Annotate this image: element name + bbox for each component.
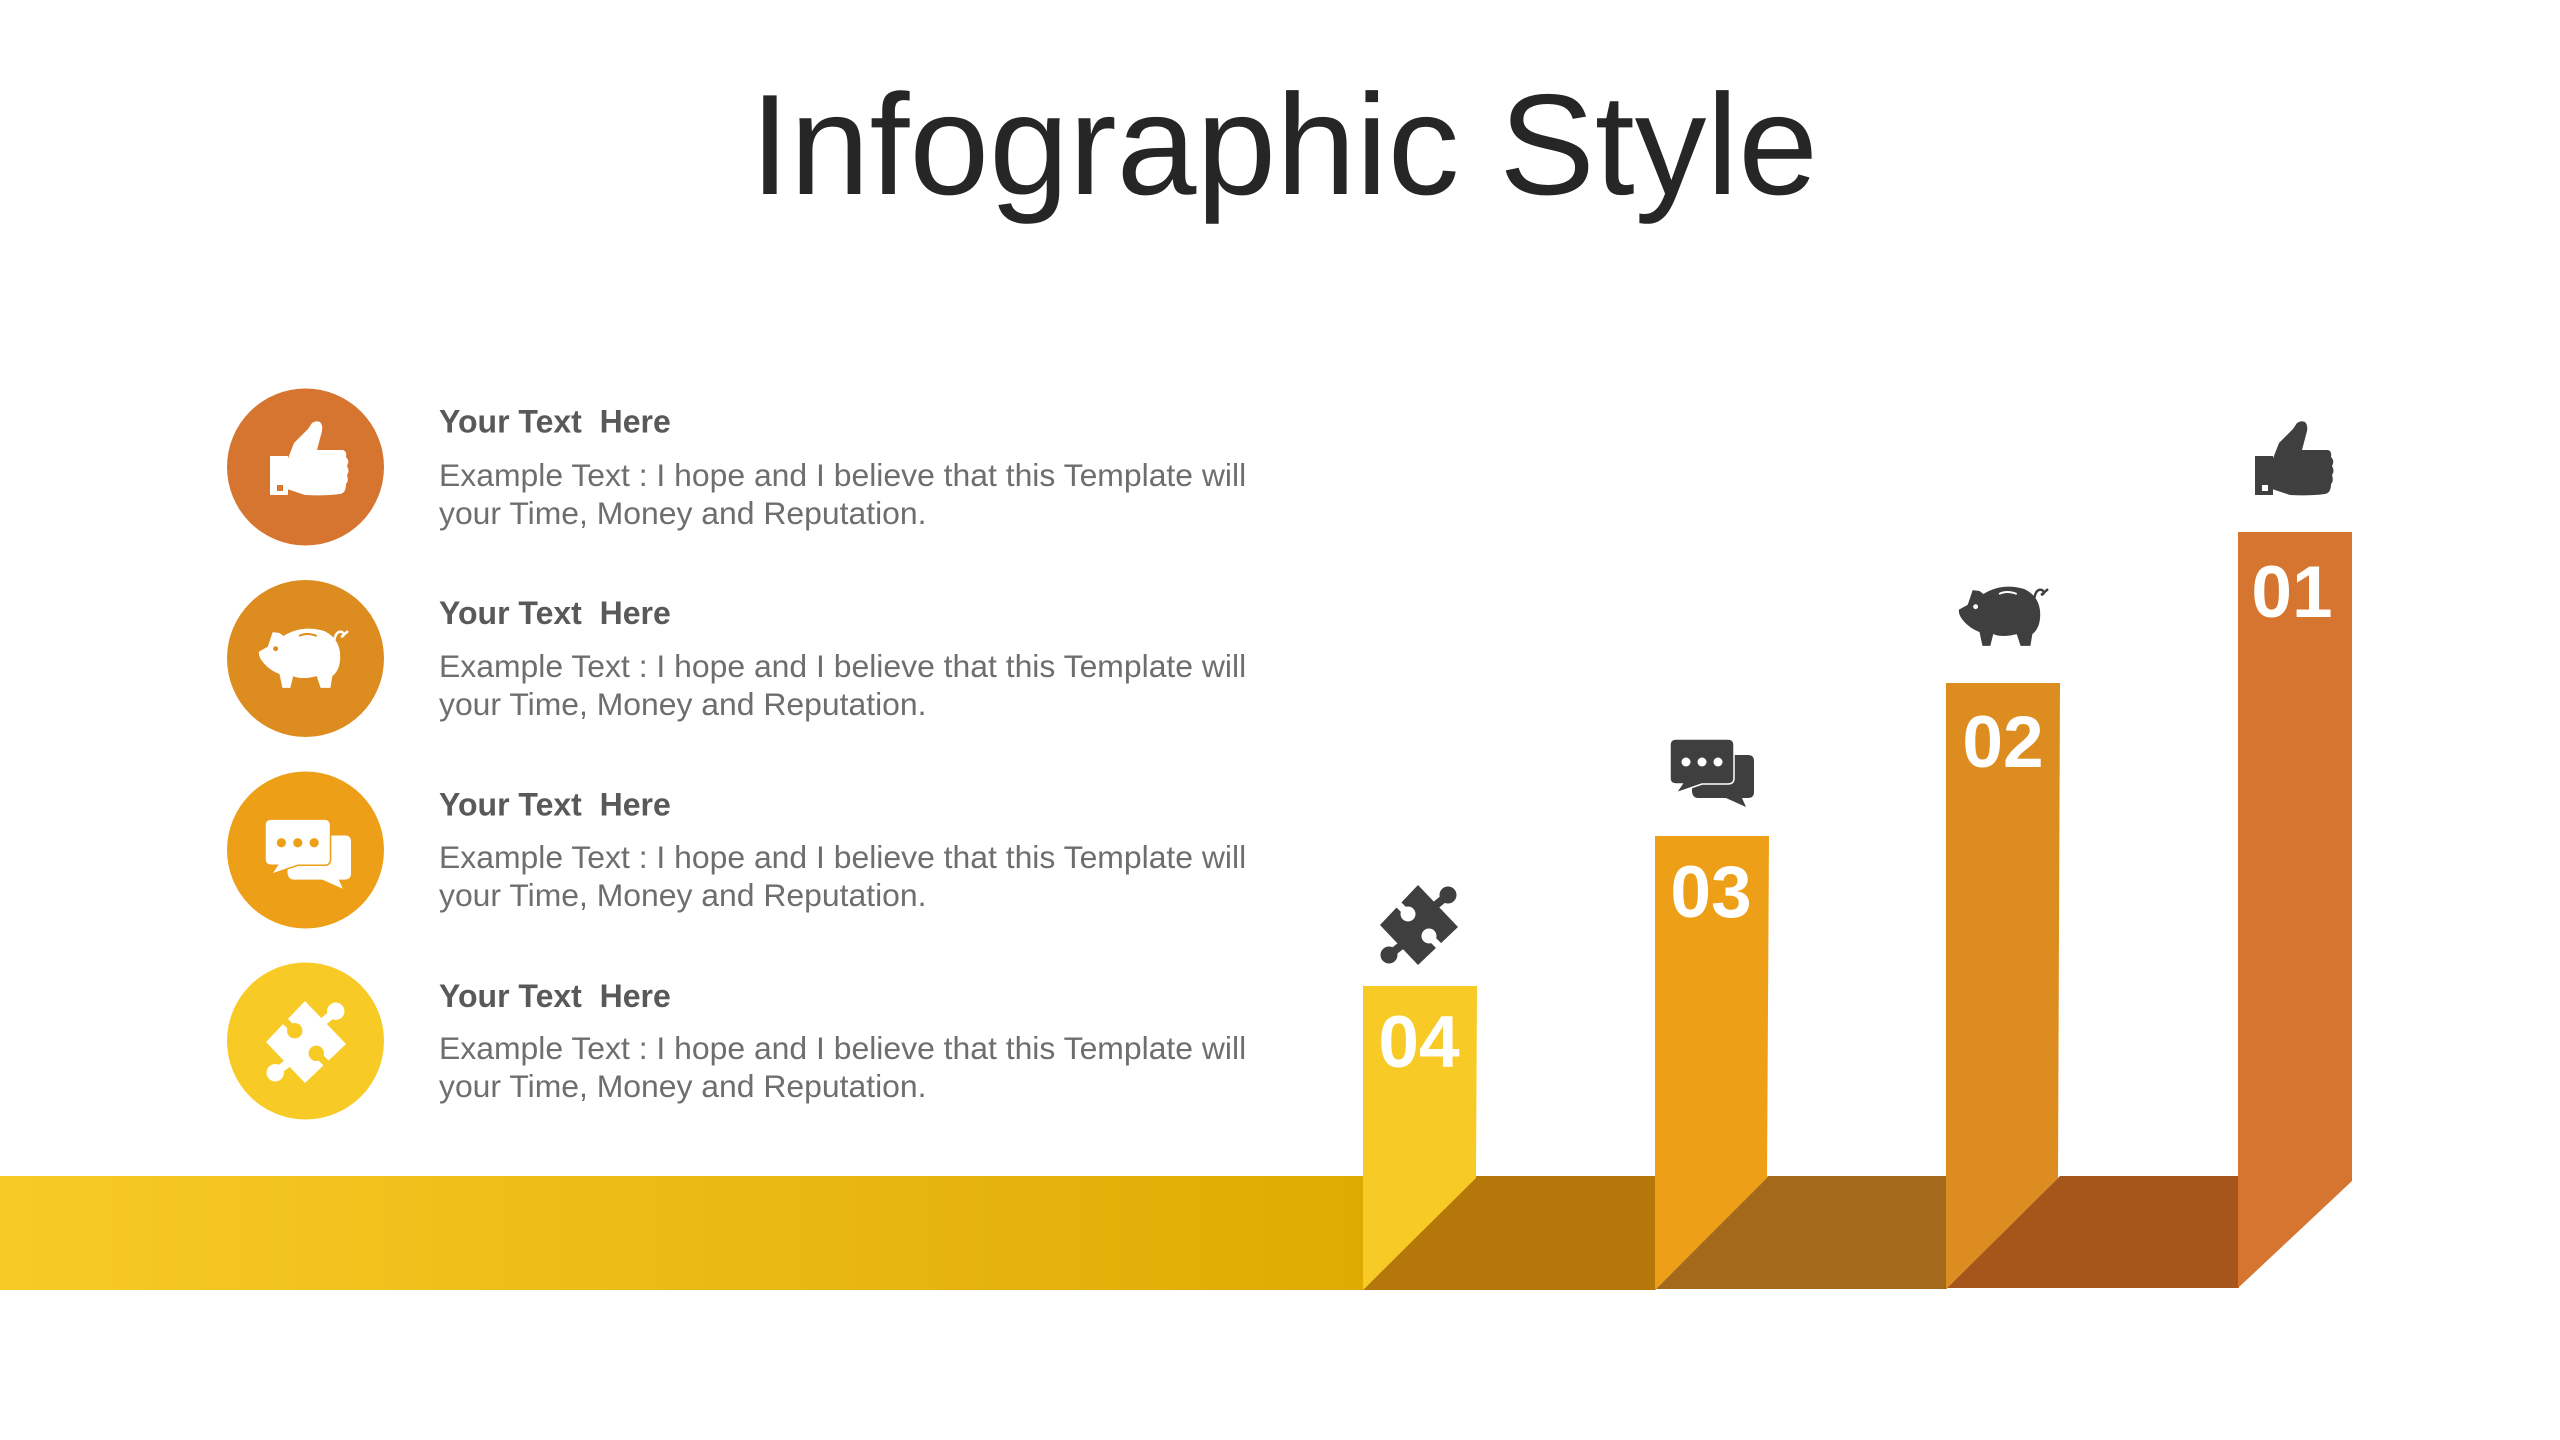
step bar 01: 01 (2251, 552, 2333, 633)
icon: dark chat bubbles (1670, 739, 1754, 807)
text block 4: Example Text : I hope and I believe that this Template will (439, 1030, 1246, 1066)
list item 4 (227, 962, 1246, 1120)
icon: piggy bank circle (227, 580, 384, 737)
text block 2: Example Text : I hope and I believe that this Template will (439, 648, 1246, 684)
text block 1: your Time, Money and Reputation. (439, 495, 926, 531)
text block 3: Example Text : I hope and I believe that this Template will (439, 839, 1246, 875)
list item 3 (227, 772, 1246, 928)
text block 3: your Time, Money and Reputation. (439, 877, 926, 913)
icon: thumbs up circle (227, 388, 384, 546)
step bar 02: 02 (1962, 702, 2044, 783)
text block 3 (439, 786, 1246, 913)
text block 2 (439, 595, 1246, 722)
icon: chat bubbles circle (227, 772, 384, 928)
step bar 01 (2238, 532, 2352, 1288)
text block 3: Your Text Here (439, 786, 671, 822)
text block 4 (439, 978, 1246, 1104)
ribbon base band (0, 1176, 1364, 1290)
text block 2: Your Text Here (439, 595, 671, 631)
text block 4: your Time, Money and Reputation. (439, 1068, 926, 1104)
text block 1: Example Text : I hope and I believe that this Template will (439, 457, 1246, 493)
step bar 04 (1363, 986, 1477, 1290)
text block 1: Your Text Here (439, 404, 671, 440)
list item 2 (227, 580, 1246, 737)
icon: dark piggy bank (1959, 587, 2048, 646)
icon: puzzle circle (227, 962, 384, 1120)
icon: dark thumbs up (2255, 421, 2334, 495)
step bar 03 (1655, 836, 1769, 1290)
step bar 04: 04 (1378, 1002, 1460, 1083)
text block 2: your Time, Money and Reputation. (439, 686, 926, 722)
step bar 03: 03 (1670, 852, 1752, 933)
step bar 02 (1946, 683, 2060, 1289)
ribbon fold segments (1363, 1176, 2239, 1290)
list item 1 (227, 388, 1246, 546)
icon: dark puzzle (1380, 885, 1458, 965)
text block 1 (439, 404, 1246, 531)
text block 4: Your Text Here (439, 978, 671, 1014)
title: Infographic Style (750, 65, 1818, 225)
